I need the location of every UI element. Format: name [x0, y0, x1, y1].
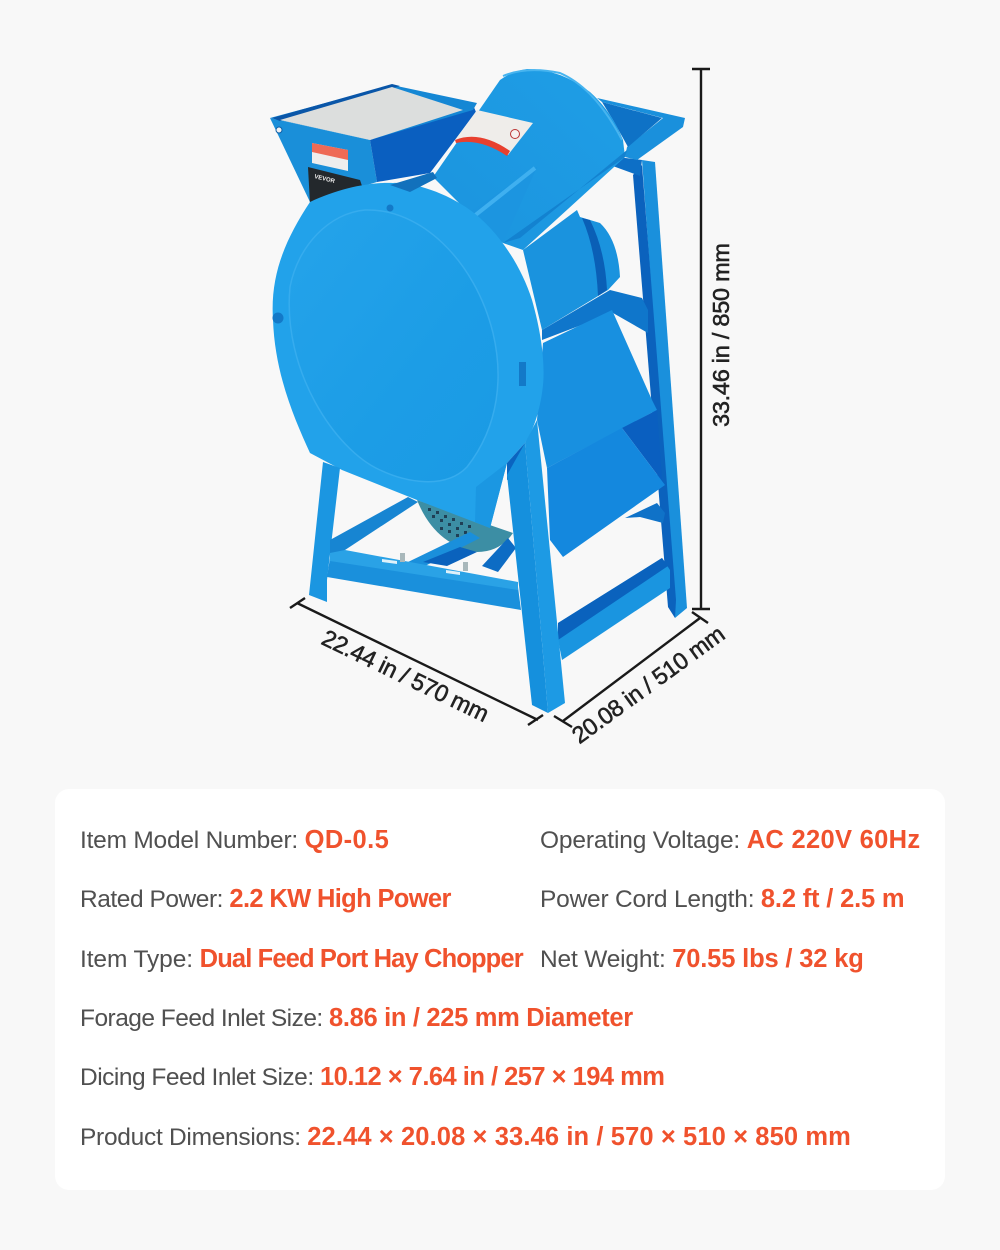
width dimension: 22.44 in / 570 mm — [318, 625, 493, 727]
warning label — [312, 143, 348, 171]
width dimension — [290, 598, 543, 727]
rear lower braces — [558, 503, 670, 660]
hopper faces — [270, 118, 377, 202]
spec: forage inlet: Forage Feed Inlet Size: 8.86 in / 225 mm Diameter — [80, 1004, 633, 1032]
front left leg — [309, 462, 340, 602]
specifications panel — [55, 789, 945, 1190]
spec: model number: Item Model Number: QD-0.5 — [80, 826, 389, 854]
motor bracket — [542, 290, 648, 340]
spec: net weight: Net Weight: 70.55 lbs / 32 kg — [540, 945, 864, 973]
spec: voltage: Operating Voltage: AC 220V 60Hz — [540, 826, 920, 854]
spec: dicing inlet: Dicing Feed Inlet Size: 10.12 × 7.64 in / 257 × 194 mm — [80, 1063, 664, 1091]
disc cover — [289, 210, 498, 482]
machine: hay chopper — [270, 69, 687, 713]
spec: rated power: Rated Power: 2.2 KW High Power — [80, 885, 451, 913]
guard plate upper — [537, 310, 657, 468]
bolts — [400, 553, 468, 571]
product plate — [308, 167, 362, 204]
chute warning label — [455, 110, 533, 156]
base frame — [327, 497, 521, 610]
product illustration with dimensions — [270, 68, 734, 749]
depth dimension: 20.08 in / 510 mm — [567, 621, 730, 749]
right rear leg — [600, 155, 687, 618]
round chute — [433, 69, 627, 250]
disc housing — [273, 183, 544, 528]
height dimension — [692, 69, 734, 609]
motor body — [523, 210, 620, 330]
spec: dimensions: Product Dimensions: 22.44 × 20.08 × 33.46 in / 570 × 510 × 850 mm — [80, 1123, 851, 1151]
product plate: VEVOR — [314, 174, 336, 185]
spec: cord length: Power Cord Length: 8.2 ft / 2.5 m — [540, 885, 904, 913]
spec: item type: Item Type: Dual Feed Port Hay Chopper — [80, 945, 523, 973]
motor fan end — [417, 500, 513, 552]
disc hardware — [272, 172, 526, 386]
front right leg — [507, 420, 565, 713]
housing lower shade — [475, 463, 507, 528]
height dimension: 33.46 in / 850 mm — [708, 243, 734, 427]
left hopper — [270, 84, 477, 204]
guard plate lower — [547, 410, 665, 557]
right hopper tray — [597, 98, 685, 160]
hopper steel top — [280, 87, 463, 140]
